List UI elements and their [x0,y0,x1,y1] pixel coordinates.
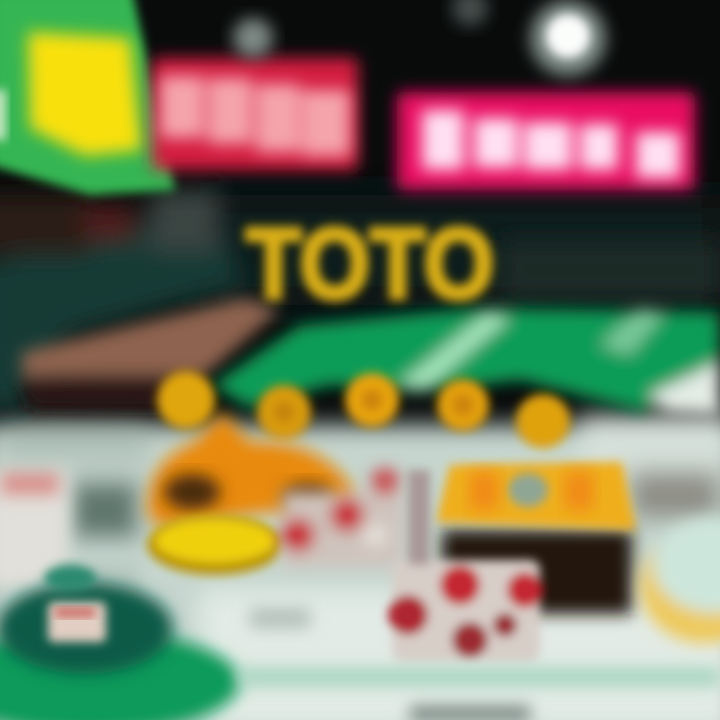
icon: red and white checker stack centre [281,468,404,568]
background: pale lower floor [0,415,720,720]
icon: dim spotlight left [233,18,273,58]
icon: row of gold coins [157,371,570,448]
heading: TOTO: TOTO [246,208,494,320]
icon: pale teal plate with yellow arc [640,517,720,643]
icon: green banner with yellow square [0,0,175,195]
icon: red and white checker stack front [388,470,543,662]
icon: white and red card on left [0,470,140,595]
panel: dark teal stands on the left [0,190,245,410]
panel: brown walkway [20,298,280,410]
icon: bright spotlight [530,0,606,76]
icon: yellow box on dark base [436,462,636,614]
icon: orange basket with yellow dish [147,412,354,575]
icon: dim spotlight top [452,0,488,26]
icon: green hat bottom left [0,565,240,720]
panel: green pitch [212,308,720,415]
panel: red neon sign [152,58,358,170]
panel: magenta neon sign [397,92,695,190]
panel: bottom strip [240,608,720,720]
